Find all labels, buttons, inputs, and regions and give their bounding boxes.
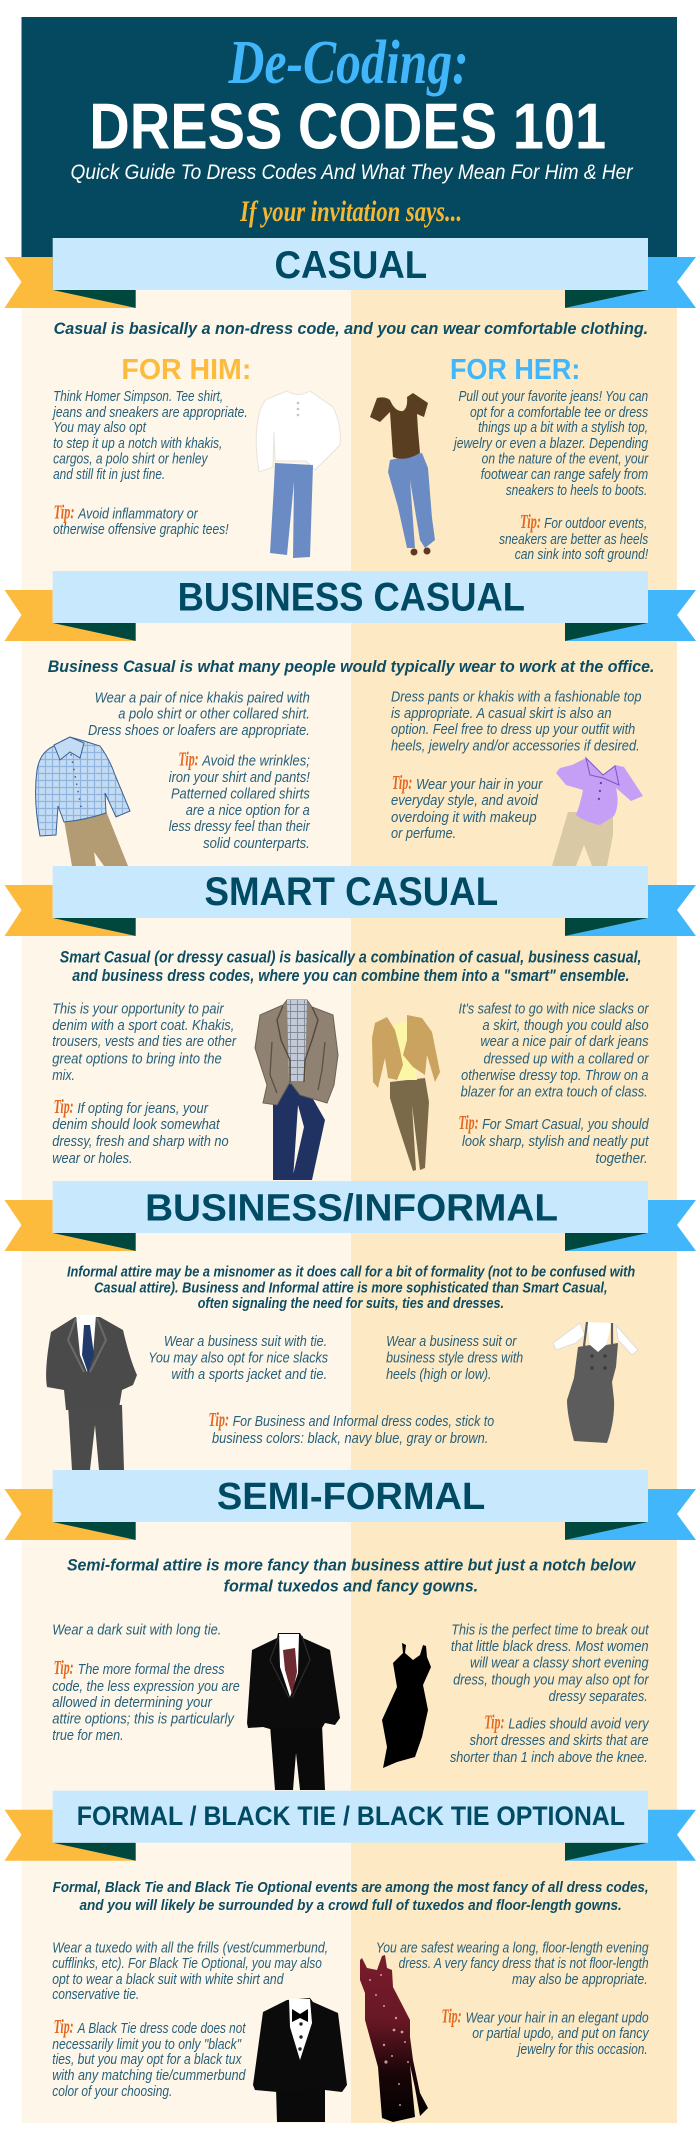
banner: business informal — [4, 1181, 696, 1251]
text: business casual him: Dress shoes or loafers are appropriate. — [88, 722, 310, 739]
text: casual him: and still fit in just fine. — [53, 466, 165, 483]
section: smart casual — [4, 866, 696, 1180]
text: formal him: A Black Tie dress code does not — [77, 2020, 246, 2037]
tip: business informal: For Business and Informal dress codes, stick to — [233, 1413, 495, 1430]
text: semi-formal her: dressy separates. — [549, 1688, 648, 1705]
text: business casual him: solid counterparts. — [203, 835, 310, 852]
banner: business casual — [4, 571, 696, 641]
text: formal him: Wear a tuxedo with all the frills (vest/cummerbund, — [52, 1940, 328, 1957]
text: casual him: otherwise offensive graphic tees! — [53, 521, 229, 538]
icon: business dress — [553, 1322, 638, 1443]
intro: smart casual: and business dress codes, where you can combine them into a "smart" ensemble. — [72, 966, 629, 985]
text: business casual him: iron your shirt and pants! — [169, 769, 311, 786]
text: casual him: Avoid inflammatory or — [77, 506, 199, 522]
text: smart casual him: trousers, vests and ties are other — [52, 1033, 237, 1050]
text: smart casual her — [458, 1001, 650, 1167]
text: business casual her: is appropriate. A casual skirt is also an — [391, 705, 612, 722]
text: smart casual her: For Smart Casual, you should — [482, 1116, 649, 1133]
intro: business informal — [67, 1265, 635, 1312]
text: business casual him: are a nice option for a — [186, 802, 310, 819]
icon: tan jacket and olive pants — [372, 1015, 440, 1171]
intro: business informal: Informal attire may be a misnomer as it does call for a bit of formality (not to be confused with — [67, 1265, 635, 1281]
text: smart casual him: great options to bring into the — [52, 1051, 222, 1068]
text: casual her: on the nature of the event, your — [482, 451, 649, 467]
text: business casual him: Avoid the wrinkles; — [201, 753, 310, 769]
text: business casual her: option. Feel free to dress up your outfit with — [391, 721, 635, 738]
text: semi-formal her — [450, 1622, 650, 1766]
text: business informal him: You may also opt for nice slacks — [148, 1350, 328, 1367]
text: casual her: sneakers are better as heels — [499, 531, 648, 548]
subtitle: Quick Guide To Dress Codes And What They Mean For Him & Her — [71, 161, 633, 184]
intro: formal — [53, 1879, 649, 1914]
intro: semi-formal: formal tuxedos and fancy gowns. — [224, 1576, 478, 1596]
text: casual him: cargos, a polo shirt or henley — [53, 451, 209, 467]
text: business casual him: Tip: — [179, 749, 199, 771]
text: smart casual him: Tip: — [54, 1096, 74, 1118]
text: business informal her: business style dress with — [386, 1350, 523, 1367]
text: smart casual her: dressed up with a collared or — [483, 1051, 650, 1068]
text: business informal her: Wear a business suit or — [386, 1333, 518, 1350]
text: casual her: jewelry or even a blazer. Depending — [452, 435, 649, 452]
text: business informal her: heels (high or low). — [386, 1366, 491, 1383]
text: casual her: things up a bit with a stylish top, — [478, 419, 648, 436]
text: semi-formal her: Tip: — [484, 1712, 504, 1734]
text: business casual him — [88, 689, 311, 852]
text: formal him: conservative tie. — [52, 1986, 139, 2003]
icon: tee and jeans — [370, 393, 435, 556]
icon: tuxedo — [253, 1998, 347, 2122]
text: smart casual him: This is your opportunity to pair — [52, 1001, 225, 1017]
text: semi-formal her: will wear a classy short evening — [470, 1655, 649, 1672]
text: smart casual him: If opting for jeans, your — [77, 1100, 209, 1117]
text: casual her: Tip: — [520, 511, 541, 533]
intro: semi-formal: Semi-formal attire is more fancy than business attire but just a notch below — [67, 1555, 637, 1575]
heading: business casual: BUSINESS CASUAL — [178, 575, 525, 620]
text: smart casual him: mix. — [52, 1067, 75, 1084]
section: business informal — [4, 1181, 696, 1470]
text: casual her: Pull out your favorite jeans! You can — [458, 388, 648, 405]
text: casual her: For outdoor events, — [544, 515, 647, 532]
section: formal — [4, 1791, 696, 2122]
text: smart casual him: dressy, fresh and sharp with no — [52, 1133, 229, 1150]
text: business casual him: Wear a pair of nice khakis paired with — [95, 689, 310, 706]
panel: him column — [22, 290, 351, 2123]
tip: business informal: Tip: — [208, 1409, 229, 1431]
intro: formal: and you will likely be surrounded by a crowd full of tuxedos and floor-length gowns. — [79, 1897, 622, 1914]
text: smart casual her: blazer for an extra touch of class. — [461, 1084, 648, 1100]
text: smart casual her: a skirt, though you could also — [483, 1017, 649, 1034]
text: semi-formal him: true for men. — [52, 1727, 124, 1744]
text: business informal him: with a sports jacket and tie. — [171, 1366, 327, 1383]
text: casual her: can sink into soft ground! — [515, 546, 649, 563]
heading: for him: FOR HIM: — [121, 353, 251, 385]
banner: formal — [4, 1791, 696, 1861]
heading: formal: FORMAL / BLACK TIE / BLACK TIE OPTIONAL — [77, 1802, 625, 1831]
heading: for her: FOR HER: — [450, 353, 580, 385]
title: De-Coding: De-Coding: — [228, 29, 469, 97]
text: smart casual her: otherwise dressy top. Throw on a — [461, 1067, 649, 1084]
text: formal her: You are safest wearing a long, floor-length evening — [376, 1940, 649, 1957]
text: smart casual her: wear a nice pair of dark jeans — [480, 1033, 649, 1050]
intro: casual: Casual is basically a non-dress code, and you can wear comfortable clothing. — [54, 319, 648, 338]
text: formal her: may also be appropriate. — [512, 1971, 648, 1988]
text: business casual her: heels, jewelry and/or accessories if desired. — [391, 738, 640, 754]
text: semi-formal him: allowed in determining your — [52, 1694, 213, 1711]
text: business casual her: everyday style, and avoid — [391, 792, 539, 809]
text: formal her: Wear your hair in an elegant updo — [466, 2010, 649, 2027]
text: business casual her — [391, 689, 642, 842]
intro: business informal: often signaling the need for suits, ties and dresses. — [198, 1296, 504, 1312]
intro: business informal: Casual attire). Business and Informal attire is more sophisticated than Smart Casual, — [94, 1281, 608, 1296]
text: semi-formal her: dress, though you may also opt for — [453, 1672, 650, 1689]
icon: blazer and jeans — [255, 1000, 338, 1180]
header background — [22, 17, 677, 290]
text: semi-formal him — [52, 1622, 240, 1744]
text: formal him: opt to wear a black suit with white shirt and — [52, 1971, 284, 1988]
intro: business casual: Business Casual is what many people would typically wear to work at the office. — [48, 657, 654, 676]
text: casual him — [51, 388, 248, 538]
icon: plaid shirt and khakis — [36, 737, 130, 866]
text: semi-formal him: Tip: — [54, 1657, 74, 1679]
banner: semi-formal — [4, 1470, 696, 1540]
lead-in: If your invitation says... — [239, 195, 462, 229]
text: formal her: dress. A very fancy dress that is not floor-length — [399, 1955, 649, 1972]
text: semi-formal her: short dresses and skirts that are — [470, 1732, 649, 1749]
text: business informal her — [386, 1333, 523, 1383]
text: business casual her: overdoing it with makeup — [391, 809, 537, 826]
banner: casual — [4, 238, 696, 308]
text: formal him: cufflinks, etc). For Black Tie Optional, you may also — [52, 1955, 322, 1972]
text: casual her: opt for a comfortable tee or dress — [470, 404, 648, 421]
heading: smart casual: SMART CASUAL — [204, 869, 498, 914]
text: casual him: Tip: — [54, 502, 75, 524]
text: formal him: with any matching tie/cummerbund — [52, 2067, 246, 2084]
text: semi-formal her: Ladies should avoid very — [508, 1716, 650, 1733]
heading: semi-formal: SEMI-FORMAL — [217, 1475, 485, 1518]
text: casual him: Think Homer Simpson. Tee shirt, — [53, 388, 223, 405]
text: formal him: ties, but you may opt for a black tux — [52, 2051, 243, 2068]
text: semi-formal him: Wear a dark suit with long tie. — [52, 1622, 221, 1639]
text: smart casual him: wear or holes. — [52, 1150, 133, 1167]
text: casual her: footwear can range safely from — [481, 466, 649, 483]
text: smart casual him: denim with a sport coat. Khakis, — [52, 1017, 234, 1034]
section: semi-formal — [4, 1470, 696, 1790]
icon: business suit — [46, 1315, 137, 1470]
text: smart casual him — [52, 1001, 237, 1167]
panel: her column — [351, 290, 677, 2123]
icon: little black dress — [382, 1643, 431, 1768]
text: casual her — [452, 388, 649, 563]
intro: smart casual: Smart Casual (or dressy casual) is basically a combination of casual, business casual, — [60, 947, 641, 966]
text: semi-formal her: This is the perfect time to break out — [451, 1622, 649, 1639]
text: formal him: necessarily limit you to only "black" — [52, 2036, 242, 2053]
text: business casual her: Wear your hair in your — [416, 776, 544, 793]
text: business informal him: Wear a business suit with tie. — [164, 1333, 327, 1350]
text: business casual him: a polo shirt or other collared shirt. — [118, 706, 310, 722]
text: smart casual her: together. — [595, 1150, 648, 1167]
text: semi-formal her: shorter than 1 inch above the knee. — [450, 1749, 648, 1766]
text: business casual him: Patterned collared shirts — [171, 786, 310, 802]
text: formal him: color of your choosing. — [52, 2083, 172, 2100]
text: business casual him: less dressy feel than their — [169, 818, 311, 835]
intro: semi-formal — [67, 1555, 637, 1596]
text: semi-formal him: code, the less expression you are — [52, 1678, 240, 1695]
text: casual her: sneakers to heels to boots. — [506, 482, 647, 499]
section: casual — [4, 238, 696, 563]
tip: business informal — [208, 1409, 495, 1447]
text: smart casual her: look sharp, stylish and neatly put — [462, 1133, 649, 1150]
icon: sequin gown — [360, 1955, 428, 2122]
text: semi-formal him: attire options; this is particularly — [52, 1711, 235, 1728]
text: casual him: You may also opt — [53, 419, 147, 436]
intro: formal: Formal, Black Tie and Black Tie Optional events are among the most fancy of all dress codes, — [53, 1879, 649, 1896]
icon: dark suit — [247, 1633, 340, 1790]
text: business casual her: Tip: — [392, 772, 412, 794]
text: business casual her: Dress pants or khakis with a fashionable top — [391, 689, 642, 705]
text: business casual her: or perfume. — [391, 825, 456, 842]
title: Dress Codes 101: DRESS CODES 101 — [89, 89, 606, 163]
heading: casual: CASUAL — [275, 244, 427, 287]
text: casual him: jeans and sneakers are appropriate. — [51, 404, 248, 421]
text: semi-formal her: that little black dress. Most women — [451, 1638, 649, 1655]
tip: business informal: business colors: black, navy blue, gray or brown. — [212, 1430, 488, 1447]
banner: smart casual — [4, 866, 696, 936]
text: formal her: Tip: — [441, 2006, 462, 2028]
text: casual him: to step it up a notch with khakis, — [53, 435, 222, 452]
text: formal him: Tip: — [54, 2016, 74, 2038]
text: formal her — [376, 1940, 650, 2058]
text: formal her: or partial updo, and put on fancy — [472, 2025, 650, 2042]
text: formal him — [52, 1940, 328, 2100]
text: smart casual him: denim should look somewhat — [52, 1116, 220, 1133]
intro: smart casual — [60, 947, 641, 985]
icon: henley and jeans — [256, 391, 340, 558]
icon: purple blouse and trousers — [552, 758, 643, 866]
text: semi-formal him: The more formal the dress — [78, 1661, 225, 1678]
title block — [71, 29, 633, 229]
text: business informal him — [148, 1333, 328, 1383]
heading: business informal: BUSINESS/INFORMAL — [145, 1187, 558, 1230]
text: smart casual her: Tip: — [458, 1112, 479, 1134]
text: smart casual her: It's safest to go with nice slacks or — [458, 1001, 650, 1017]
text: formal her: jewelry for this occasion. — [516, 2041, 648, 2058]
section: business casual — [4, 571, 696, 866]
